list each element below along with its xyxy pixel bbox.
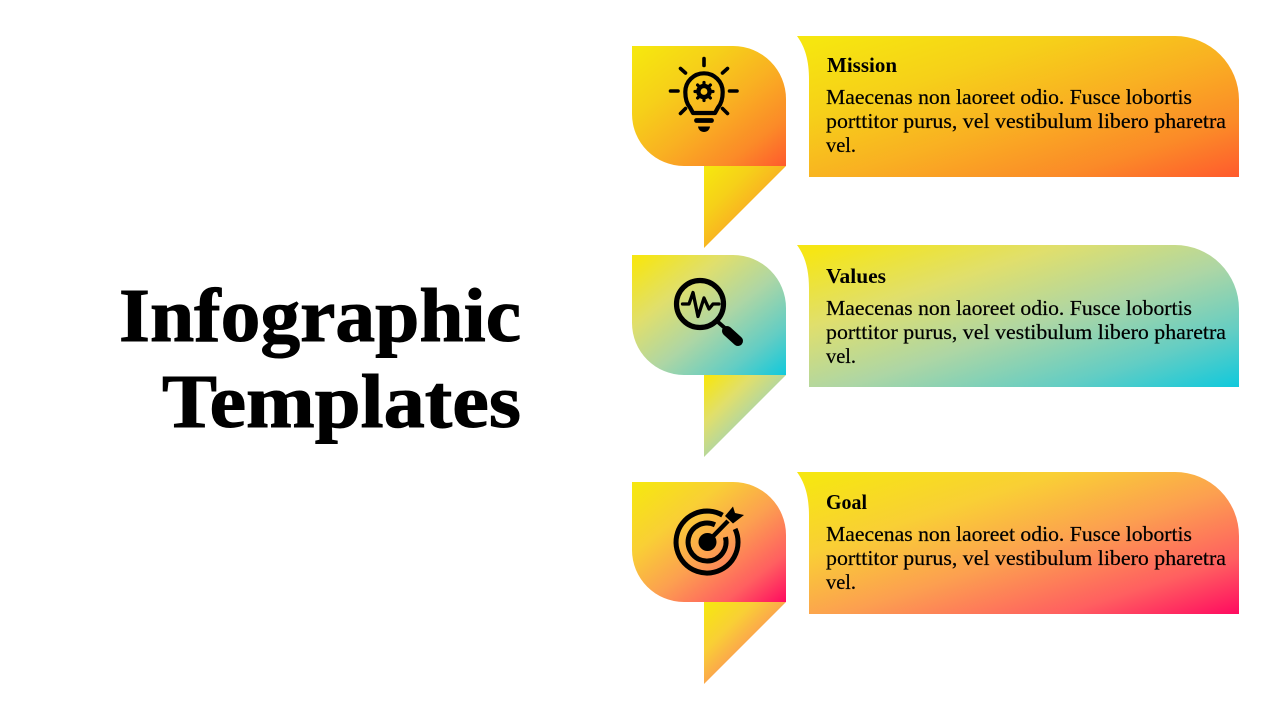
- card background: values: [797, 245, 1239, 387]
- title: Infographic: [119, 274, 521, 358]
- text block: values: porttitor purus, vel vestibulum libero pharetra: [826, 320, 1227, 344]
- heading: values: Values: [826, 264, 886, 288]
- panel: values icon bubble: [632, 255, 786, 457]
- icon: magnifier with pulse: [676, 280, 738, 341]
- title: Templates: [162, 360, 521, 444]
- panel: mission text card: [797, 36, 1239, 177]
- text block: values: vel.: [826, 344, 856, 368]
- text block: goal: vel.: [826, 570, 856, 594]
- panel: values text card: [797, 245, 1239, 387]
- icon: light bulb with gear: [670, 58, 737, 132]
- card background: mission: [797, 36, 1239, 177]
- heading: mission: Mission: [827, 53, 897, 77]
- title: [119, 274, 521, 444]
- heading: goal: Goal: [826, 490, 867, 514]
- text block: values: [826, 296, 1227, 368]
- bubble tail: goal: [704, 602, 786, 684]
- bubble body: values: [632, 255, 786, 375]
- bubble tail: mission: [704, 166, 786, 248]
- bubble body: mission: [632, 46, 786, 166]
- bubble tail: values: [704, 375, 786, 457]
- text block: goal: Maecenas non laoreet odio. Fusce lobortis: [826, 522, 1192, 546]
- panel: mission icon bubble: [632, 46, 786, 248]
- text block: mission: vel.: [826, 133, 856, 157]
- text block: mission: [826, 85, 1227, 157]
- panel: goal icon bubble: [632, 482, 786, 684]
- text block: values: Maecenas non laoreet odio. Fusce lobortis: [826, 296, 1192, 320]
- text block: goal: porttitor purus, vel vestibulum libero pharetra: [826, 546, 1227, 570]
- text block: goal: [826, 522, 1227, 594]
- bubble body: goal: [632, 482, 786, 602]
- text block: mission: porttitor purus, vel vestibulum libero pharetra: [826, 109, 1227, 133]
- card background: goal: [797, 472, 1239, 614]
- panel: goal text card: [797, 472, 1239, 614]
- icon: target with arrow: [676, 506, 744, 573]
- text block: mission: Maecenas non laoreet odio. Fusce lobortis: [826, 85, 1192, 109]
